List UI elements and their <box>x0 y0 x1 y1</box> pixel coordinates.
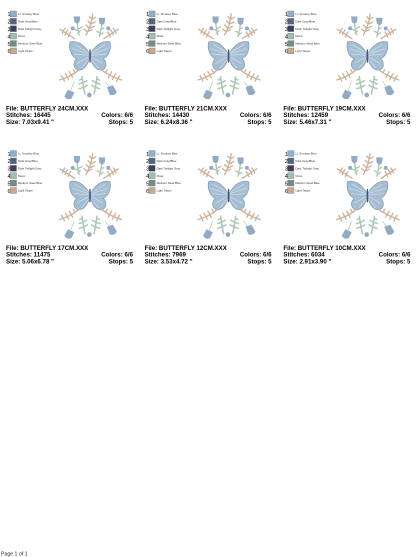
file details: File: BUTTERFLY 10CM.XXX <box>283 245 367 252</box>
color legend: 1 <box>8 152 11 158</box>
color legend: 1 <box>285 12 288 18</box>
color legend: Dark Twilight Gray <box>157 166 181 170</box>
color legend: 2 <box>8 20 11 26</box>
butterfly floral design <box>198 154 260 239</box>
file details <box>283 105 411 126</box>
color legend: 3 <box>146 27 149 33</box>
color legend: 3 <box>285 167 288 173</box>
color legend: 6 <box>146 49 149 55</box>
file details: Size: 3.53x4.72 " <box>145 258 193 265</box>
color legend: 2 <box>285 159 288 165</box>
color legend: Lt. Smokey Blue <box>157 152 178 156</box>
file details: File: BUTTERFLY 19CM.XXX <box>283 105 367 112</box>
color legend: Dark Twilight Gray <box>157 27 181 31</box>
color legend: 2 <box>146 159 149 165</box>
color legend: 1 <box>8 12 11 18</box>
color legend: Light Taupe <box>18 189 33 193</box>
color legend: Medium Steel Blue <box>18 42 43 46</box>
file details: Colors: 6/6 <box>379 112 411 119</box>
color legend: Moss <box>157 34 164 38</box>
butterfly floral design <box>198 14 260 99</box>
file details: File: BUTTERFLY 12CM.XXX <box>145 245 228 252</box>
color legend: Medium Steel Blue <box>18 181 43 185</box>
color legend: 6 <box>8 189 11 195</box>
color legend: Medium Steel Blue <box>295 42 320 46</box>
color legend: 3 <box>8 167 11 173</box>
color legend: Medium Steel Blue <box>157 42 181 46</box>
color legend: Moss <box>295 174 303 178</box>
color legend: 1 <box>285 152 288 158</box>
color legend: 4 <box>146 174 149 180</box>
color legend: Moss <box>295 34 303 38</box>
color legend: Light Taupe <box>295 189 311 193</box>
color legend: 6 <box>285 49 288 55</box>
butterfly floral design <box>337 154 399 239</box>
color legend: 2 <box>8 159 11 165</box>
file details: Colors: 6/6 <box>240 252 272 259</box>
panel: BUTTERFLY 10CM <box>283 151 411 265</box>
file details: Stops: 5 <box>386 258 411 265</box>
color legend: 1 <box>146 152 149 158</box>
panel: BUTTERFLY 12CM <box>145 151 272 265</box>
color legend: Dark Gray/Blue <box>157 19 177 23</box>
file details: Size: 7.03x9.41 " <box>6 119 54 126</box>
color legend <box>8 151 43 195</box>
color legend: 5 <box>8 181 11 187</box>
color legend: 5 <box>8 42 11 48</box>
color legend: 6 <box>285 189 288 195</box>
file details: Size: 6.24x8.36 " <box>145 119 193 126</box>
file details: Colors: 6/6 <box>240 112 272 119</box>
color legend: Moss <box>157 174 164 178</box>
color legend: 5 <box>146 181 149 187</box>
color legend: 3 <box>285 27 288 33</box>
color legend: Light Taupe <box>18 49 33 53</box>
color legend <box>8 11 43 55</box>
color legend: 6 <box>8 49 11 55</box>
file details: Stops: 5 <box>247 258 272 265</box>
color legend: Dark Gray/Blue <box>18 159 38 163</box>
file details <box>145 245 272 265</box>
file details: Stitches: 11475 <box>6 252 51 259</box>
color legend: Light Taupe <box>295 49 311 53</box>
color legend: Dark Gray/Blue <box>18 19 38 23</box>
color legend: 4 <box>8 174 11 180</box>
color legend <box>146 151 181 195</box>
file details: Stops: 5 <box>386 119 411 126</box>
file details: Size: 5.06x6.78 " <box>6 258 54 265</box>
color legend: Light Taupe <box>157 189 172 193</box>
color legend: 4 <box>285 34 288 40</box>
color legend: 4 <box>8 34 11 40</box>
color legend: 3 <box>146 167 149 173</box>
panel: BUTTERFLY 24CM <box>6 11 134 126</box>
file details: Size: 5.46x7.31 " <box>283 119 331 126</box>
color legend: Dark Twilight Gray <box>295 27 320 31</box>
color legend: Lt. Smokey Blue <box>295 152 317 156</box>
color legend: 3 <box>8 27 11 33</box>
color legend: Lt. Smokey Blue <box>18 152 39 156</box>
file details <box>6 105 134 126</box>
file details: Stitches: 12459 <box>283 112 329 119</box>
color legend: 4 <box>146 34 149 40</box>
file details: Stops: 5 <box>247 119 272 126</box>
color legend: Dark Twilight Gray <box>18 166 42 170</box>
file details: Stitches: 14430 <box>145 112 190 119</box>
color legend: 2 <box>146 20 149 26</box>
color legend: Dark Gray/Blue <box>295 159 316 163</box>
panel: BUTTERFLY 21CM <box>145 11 272 126</box>
file details: Stops: 5 <box>109 119 134 126</box>
color legend: Lt. Smokey Blue <box>18 12 39 16</box>
file details: Colors: 6/6 <box>379 252 411 259</box>
color legend: Medium Steel Blue <box>295 181 320 185</box>
color legend: Moss <box>18 34 25 38</box>
color legend: Medium Steel Blue <box>157 181 181 185</box>
color legend: 5 <box>285 42 288 48</box>
file details <box>6 245 134 265</box>
file details: File: BUTTERFLY 24CM.XXX <box>6 105 89 112</box>
file details: Size: 2.91x3.90 " <box>283 258 331 265</box>
file details: Stops: 5 <box>109 258 134 265</box>
color legend <box>285 11 320 55</box>
file details <box>283 245 411 265</box>
color legend: 1 <box>146 12 149 18</box>
color legend <box>285 151 320 195</box>
color legend: 5 <box>285 181 288 187</box>
color legend: Dark Twilight Gray <box>18 27 42 31</box>
panel: BUTTERFLY 19CM <box>283 11 411 126</box>
butterfly floral design <box>59 154 122 239</box>
color legend: 6 <box>146 189 149 195</box>
color legend: Lt. Smokey Blue <box>157 12 178 16</box>
file details: Colors: 6/6 <box>101 252 134 259</box>
color legend: 2 <box>285 20 288 26</box>
panel: BUTTERFLY 17CM <box>6 151 134 265</box>
butterfly floral design <box>59 14 122 99</box>
color legend: Dark Gray/Blue <box>157 159 177 163</box>
color legend <box>146 11 181 55</box>
file details: Stitches: 16445 <box>6 112 51 119</box>
color legend: 4 <box>285 174 288 180</box>
file details <box>145 105 272 126</box>
file details: File: BUTTERFLY 21CM.XXX <box>145 105 228 112</box>
file details: Stitches: 6034 <box>283 252 325 259</box>
color legend: Lt. Smokey Blue <box>295 12 317 16</box>
butterfly floral design <box>337 14 399 99</box>
color legend: Dark Twilight Gray <box>295 166 320 170</box>
color legend: Dark Gray/Blue <box>295 19 316 23</box>
file details: Stitches: 7969 <box>145 252 186 259</box>
file details: Colors: 6/6 <box>101 112 134 119</box>
color legend: Moss <box>18 174 25 178</box>
color legend: Light Taupe <box>157 49 172 53</box>
color legend: 5 <box>146 42 149 48</box>
file details: File: BUTTERFLY 17CM.XXX <box>6 245 89 252</box>
